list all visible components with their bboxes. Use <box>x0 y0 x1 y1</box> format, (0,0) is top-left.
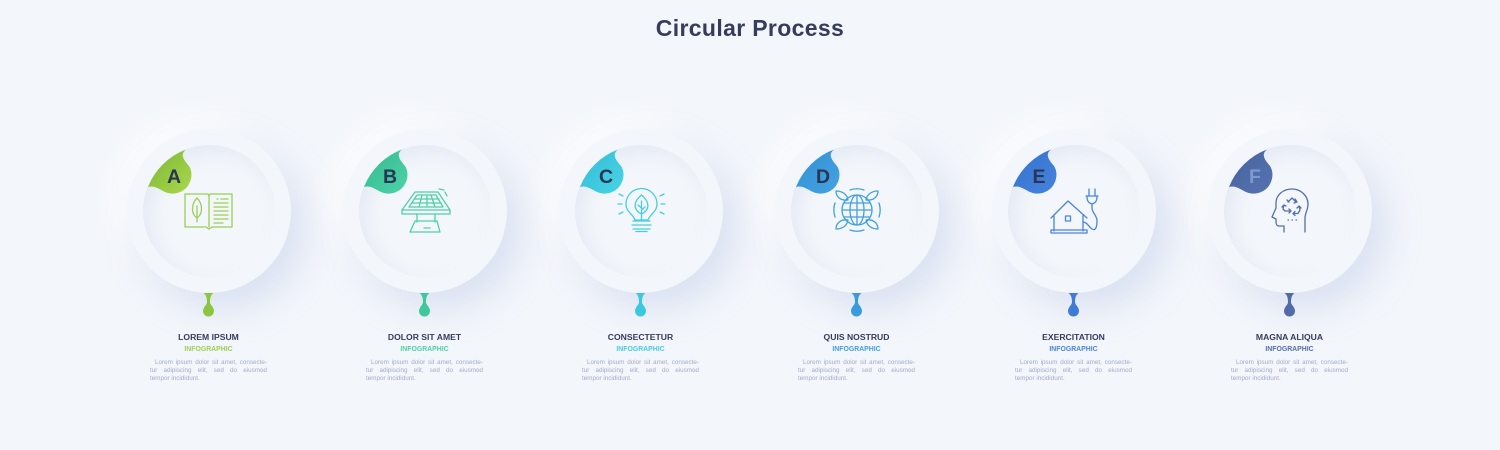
step D graphics <box>796 150 881 316</box>
step D graphics: D <box>816 166 830 188</box>
text: step C: Lorem ipsum dolor sit amet, consecte- <box>587 359 699 366</box>
text: step C <box>582 332 699 382</box>
text: step A: tur adipiscing elit, sed do eiusmod <box>150 367 267 374</box>
step B graphics: B <box>383 166 397 188</box>
text: step E <box>1015 332 1132 382</box>
text: step C: INFOGRAPHIC <box>616 346 665 353</box>
text: step A: Lorem ipsum dolor sit amet, consecte- <box>155 359 267 366</box>
panel: step F <box>1224 145 1393 382</box>
text: step A: INFOGRAPHIC <box>184 346 233 353</box>
step E graphics: E <box>1032 166 1046 188</box>
text: step F: tur adipiscing elit, sed do eiusmod <box>1231 367 1348 374</box>
step F graphics <box>1229 150 1309 316</box>
panel: step C <box>575 145 744 382</box>
step B graphics <box>364 150 451 316</box>
text: step E: tur adipiscing elit, sed do eiusmod <box>1015 367 1132 374</box>
text: step F: Lorem ipsum dolor sit amet, consecte- <box>1236 359 1348 366</box>
text: step C: CONSECTETUR <box>608 332 673 342</box>
title: Circular Process <box>656 15 844 41</box>
panel: step B <box>359 145 528 382</box>
text: step A <box>150 332 267 382</box>
text: step B: Lorem ipsum dolor sit amet, consecte- <box>371 359 483 366</box>
text: step A: LOREM IPSUM <box>178 332 239 342</box>
text: step F <box>1231 332 1348 382</box>
text: step C: tur adipiscing elit, sed do eiusmod <box>582 367 699 374</box>
step F graphics: F <box>1249 166 1261 188</box>
text: step E: tempor incididunt. <box>1015 375 1065 382</box>
step E graphics <box>1013 150 1099 316</box>
step C graphics: C <box>599 166 613 188</box>
text: step F: tempor incididunt. <box>1231 375 1281 382</box>
panel: step A <box>143 145 312 382</box>
text: step F: INFOGRAPHIC <box>1265 346 1314 353</box>
step C graphics <box>580 150 666 316</box>
text: step D <box>798 332 915 382</box>
step A graphics: A <box>167 166 181 188</box>
text: step D: INFOGRAPHIC <box>832 346 881 353</box>
text: step D: tur adipiscing elit, sed do eiusmod <box>798 367 915 374</box>
text: step F: MAGNA ALIQUA <box>1256 332 1323 342</box>
text: step E: Lorem ipsum dolor sit amet, consecte- <box>1020 359 1132 366</box>
text: step D: Lorem ipsum dolor sit amet, consecte- <box>803 359 915 366</box>
step A graphics <box>148 150 233 316</box>
text: step C: tempor incididunt. <box>582 375 632 382</box>
text: step D: tempor incididunt. <box>798 375 848 382</box>
text: step E: INFOGRAPHIC <box>1049 346 1098 353</box>
text: step B: tur adipiscing elit, sed do eiusmod <box>366 367 483 374</box>
text: step B: DOLOR SIT AMET <box>388 332 461 342</box>
panel: step E <box>1008 145 1177 382</box>
text: step B: INFOGRAPHIC <box>400 346 449 353</box>
text: step A: tempor incididunt. <box>150 375 200 382</box>
panel: step D <box>791 145 960 382</box>
text: step D: QUIS NOSTRUD <box>824 332 889 342</box>
text: step E: EXERCITATION <box>1042 332 1105 342</box>
text: step B: tempor incididunt. <box>366 375 416 382</box>
text: step B <box>366 332 483 382</box>
